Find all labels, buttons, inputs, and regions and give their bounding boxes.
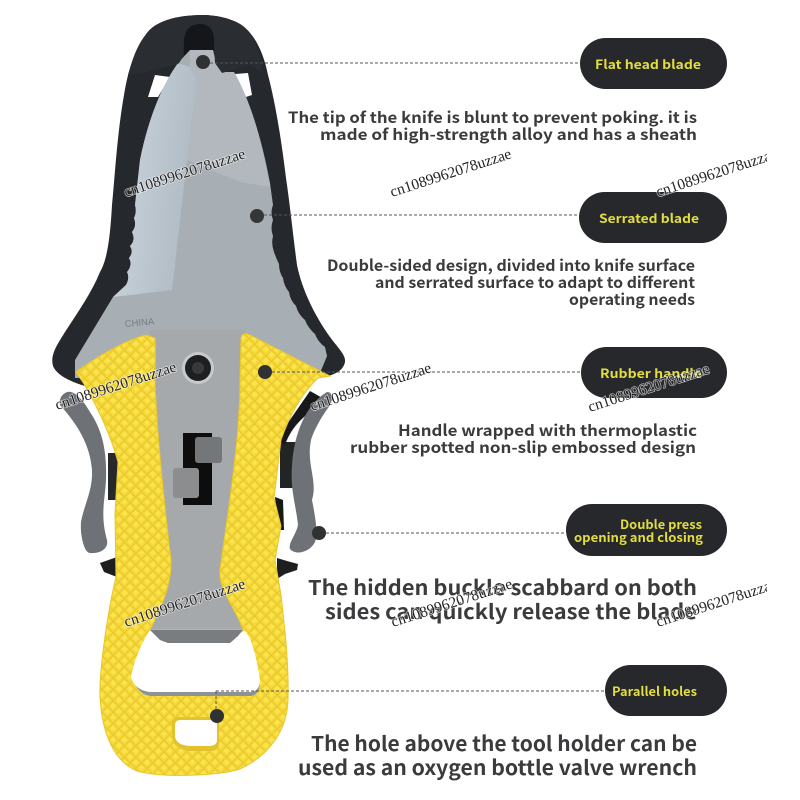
left side lever bbox=[60, 392, 119, 577]
bottle opener lower bevel bbox=[133, 680, 260, 696]
sheath bbox=[52, 15, 345, 386]
label: double press: opening and closing bbox=[574, 527, 704, 546]
description: rubber handle: rubber spotted non-slip embossed design bbox=[350, 436, 696, 458]
description: parallel holes: The hole above the tool holder can be bbox=[311, 727, 697, 757]
callout 1 leader bbox=[196, 55, 580, 69]
label: rubber handle: Rubber handle bbox=[600, 363, 702, 382]
label: double press bbox=[566, 504, 727, 556]
label: parallel holes: Parallel holes bbox=[612, 681, 697, 700]
description: double press: The hidden buckle scabbard on both bbox=[308, 571, 697, 601]
sheath slot bbox=[184, 24, 214, 55]
watermarks: cn1089962078uzzae bbox=[654, 575, 780, 631]
sheath windows bbox=[148, 73, 252, 97]
blade bbox=[75, 50, 327, 378]
description: serrated blade bbox=[327, 254, 695, 310]
knife illustration bbox=[52, 15, 345, 775]
description: serrated blade: Double-sided design, divided into knife surface bbox=[327, 254, 695, 276]
label: serrated blade bbox=[579, 192, 727, 243]
label: parallel holes bbox=[605, 665, 727, 716]
description: serrated blade: operating needs bbox=[569, 288, 695, 310]
mark: CHINA: CHINA bbox=[124, 316, 155, 330]
watermarks: cn1089962078uzzae bbox=[586, 360, 712, 416]
callout 5 leader bbox=[210, 691, 605, 723]
blade tongue bbox=[150, 630, 243, 643]
callout 3 leader bbox=[258, 365, 581, 379]
description: double press: sides can quickly release the blade bbox=[325, 595, 697, 625]
wrench hole opening bbox=[175, 720, 217, 746]
watermarks: cn1089962078uzzae bbox=[308, 359, 434, 415]
pivot screw bbox=[182, 352, 214, 384]
blade facet right bbox=[187, 50, 270, 187]
watermarks bbox=[53, 145, 780, 631]
sheath head bbox=[128, 15, 262, 75]
watermarks: cn1089962078uzzae bbox=[122, 575, 248, 631]
watermarks: cn1089962078uzzae bbox=[122, 145, 248, 201]
handle bbox=[76, 334, 330, 775]
description: rubber handle: Handle wrapped with thermoplastic bbox=[398, 419, 697, 441]
watermarks: cn1089962078uzzae bbox=[389, 575, 515, 631]
description: parallel holes bbox=[298, 727, 697, 781]
label: rubber handle bbox=[581, 347, 727, 398]
description: rubber handle bbox=[350, 419, 697, 458]
description: double press bbox=[308, 571, 697, 625]
callout 2 leader bbox=[250, 209, 579, 223]
watermarks: cn1089962078uzzae bbox=[53, 358, 179, 414]
right side lever bbox=[275, 391, 332, 579]
label: serrated blade: Serrated blade bbox=[599, 208, 699, 227]
description: flat head blade: made of high-strength alloy and has a sheath bbox=[320, 123, 697, 145]
lock slot and studs bbox=[173, 433, 222, 505]
blade bevel left bbox=[113, 63, 197, 297]
callout 4 leader bbox=[312, 526, 566, 540]
watermarks: cn1089962078uzzae bbox=[654, 145, 780, 201]
label: flat head blade bbox=[580, 38, 727, 89]
description: flat head blade: The tip of the knife is blunt to prevent poking. it is bbox=[288, 106, 697, 128]
description: serrated blade: and serrated surface to adapt to different bbox=[375, 271, 695, 293]
label: double press: Double press bbox=[620, 514, 702, 533]
watermarks: cn1089962078uzzae bbox=[388, 145, 514, 201]
wrench hole bbox=[172, 717, 219, 751]
description: parallel holes: used as an oxygen bottle valve wrench bbox=[298, 751, 697, 781]
bottle opener hole bbox=[131, 630, 260, 692]
description: flat head blade bbox=[288, 106, 697, 145]
centre plate bbox=[150, 330, 245, 640]
label: flat head blade: Flat head blade bbox=[595, 54, 701, 73]
